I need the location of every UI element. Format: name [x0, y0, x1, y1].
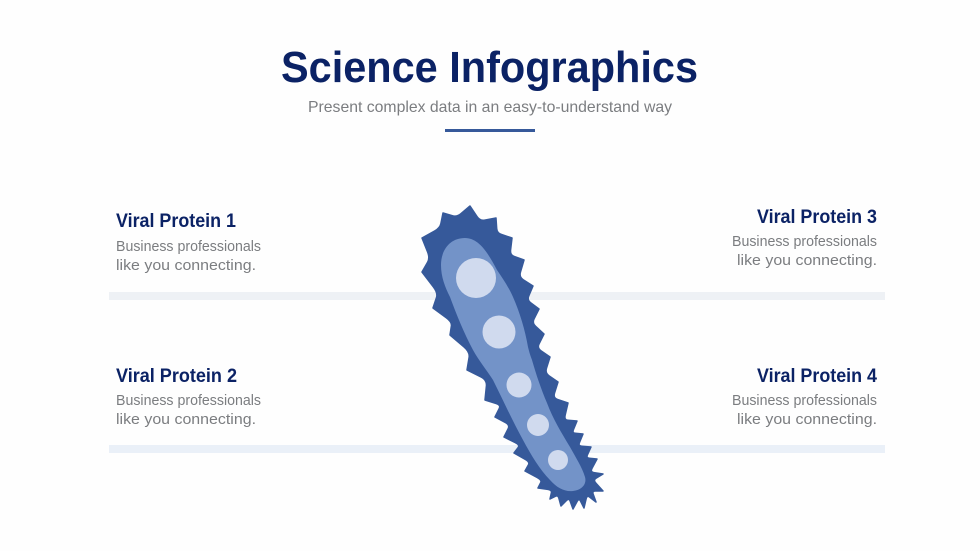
- text block: Viral Protein 2: Viral Protein 2: [116, 366, 237, 387]
- text block: Viral Protein 1: Viral Protein 1: [116, 211, 236, 232]
- text block: Viral Protein 4: Business professionals: [732, 392, 877, 409]
- text block: Viral Protein 3: [732, 207, 877, 269]
- upper horizontal band: [109, 292, 885, 300]
- text block: Viral Protein 3: like you connecting.: [737, 252, 877, 269]
- text block: Viral Protein 3: Viral Protein 3: [757, 207, 877, 228]
- text block: Viral Protein 1: Business professionals: [116, 238, 261, 255]
- text block: Viral Protein 2: Business professionals: [116, 392, 261, 409]
- text block: Viral Protein 2: [116, 366, 261, 428]
- text block: Viral Protein 4: like you connecting.: [737, 411, 877, 428]
- text block: Viral Protein 1: [116, 211, 261, 274]
- virus inner body: [441, 238, 585, 491]
- text block: Viral Protein 4: [732, 366, 877, 428]
- text block: Viral Protein 2: like you connecting.: [116, 411, 256, 428]
- virus spiky outer shell: [422, 206, 603, 509]
- icon: virus illustration: [422, 206, 603, 509]
- lower horizontal band: [109, 445, 885, 453]
- subtitle: Present complex data in an easy-to-understand way: [308, 99, 672, 116]
- title underline: [445, 129, 535, 132]
- text block: Viral Protein 3: Business professionals: [732, 233, 877, 250]
- text block: Viral Protein 4: Viral Protein 4: [757, 366, 877, 387]
- virus circles: [456, 258, 568, 470]
- text block: Viral Protein 1: like you connecting.: [116, 257, 256, 274]
- title: Science Infographics: [281, 43, 698, 92]
